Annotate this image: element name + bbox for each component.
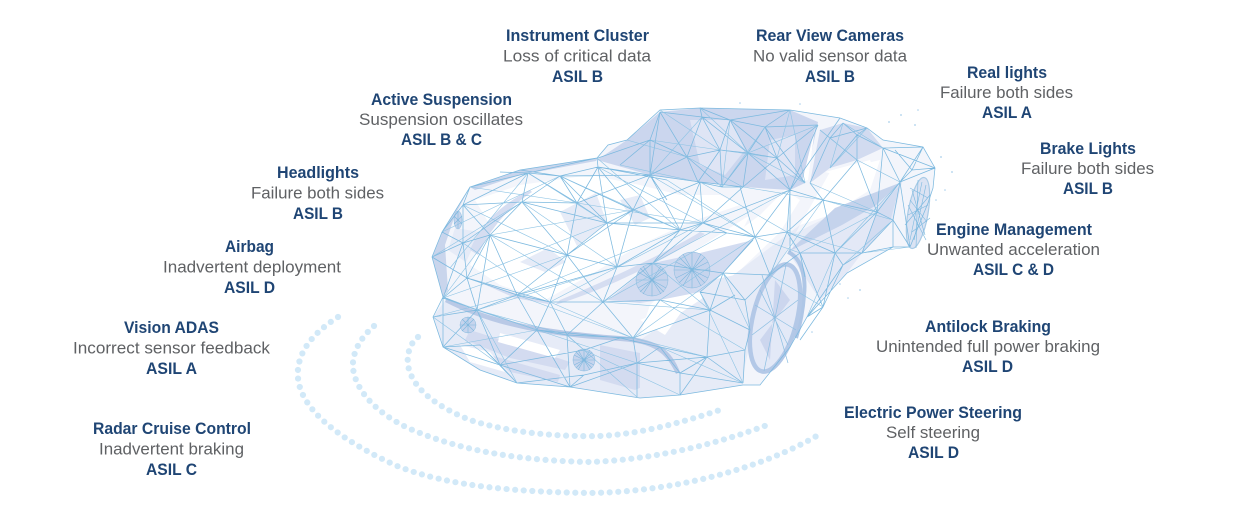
sweeping hood creases — [470, 190, 705, 305]
label: Vision ADAS: Vision ADAS — [124, 318, 219, 337]
label: Radar Cruise Control — [93, 419, 251, 479]
label: Airbag: ASIL D — [224, 278, 275, 297]
windshield — [597, 108, 818, 190]
rear fender crease — [788, 182, 902, 252]
label: Vision ADAS — [73, 318, 270, 378]
label: Active Suspension: Suspension oscillates — [359, 110, 523, 129]
fender top edge — [432, 158, 597, 297]
label: Real lights: Failure both sides — [940, 83, 1073, 102]
lower door panel — [640, 225, 800, 398]
mesh scoop lamps — [454, 211, 710, 371]
label: Brake Lights — [1021, 139, 1154, 198]
car body base fill — [432, 108, 935, 398]
label: Instrument Cluster: ASIL B — [552, 67, 603, 86]
label: Electric Power Steering: Electric Power Steering — [844, 403, 1022, 422]
label: Engine Management — [927, 220, 1100, 279]
label: Radar Cruise Control: ASIL C — [146, 460, 197, 479]
label: Active Suspension: Active Suspension — [371, 90, 512, 109]
label: Rear View Cameras — [753, 26, 908, 86]
secondary long mesh lines — [432, 108, 910, 397]
label: Headlights: Failure both sides — [251, 184, 384, 202]
label: Antilock Braking: ASIL D — [962, 357, 1013, 376]
front crease band — [445, 298, 680, 374]
label: Instrument Cluster: Instrument Cluster — [506, 26, 649, 45]
label: Engine Management: Engine Management — [936, 220, 1092, 239]
label: Antilock Braking: Antilock Braking — [925, 317, 1051, 336]
facet shading on hood — [448, 193, 845, 312]
rear wheel and tail mesh — [902, 176, 934, 250]
label: Engine Management: ASIL C & D — [973, 260, 1054, 279]
label: Real lights: Real lights — [967, 63, 1047, 82]
label: Electric Power Steering — [844, 403, 1022, 462]
label: Engine Management: Unwanted acceleration — [927, 240, 1100, 259]
label: Antilock Braking: Unintended full power braking — [876, 337, 1100, 356]
white door gap — [640, 215, 750, 335]
front wheel — [740, 259, 810, 377]
label: Radar Cruise Control: Inadvertent braking — [99, 440, 244, 458]
triangulated wire mesh — [432, 108, 935, 398]
dotted radar arcs — [298, 317, 820, 493]
label: Airbag: Airbag — [225, 237, 274, 256]
wireframe car — [432, 102, 953, 398]
label: Rear View Cameras: No valid sensor data — [753, 46, 908, 66]
label: Real lights: ASIL A — [982, 103, 1032, 122]
label: Antilock Braking — [876, 317, 1100, 376]
white grille gaps — [460, 333, 560, 372]
label: Active Suspension — [359, 90, 523, 149]
front bumper and grille fill — [433, 298, 680, 398]
label: Brake Lights: Brake Lights — [1040, 139, 1136, 158]
label: Vision ADAS: Incorrect sensor feedback — [73, 338, 270, 358]
label: Real lights — [940, 63, 1073, 122]
light facets on hood and body — [470, 160, 880, 380]
label: Headlights — [251, 163, 384, 223]
label: Rear View Cameras: ASIL B — [805, 67, 855, 86]
front wheel arch — [788, 252, 804, 338]
rear quarter panel — [788, 182, 902, 300]
label: Vision ADAS: ASIL A — [146, 359, 197, 378]
label: Brake Lights: Failure both sides — [1021, 159, 1154, 178]
label: Radar Cruise Control: Radar Cruise Control — [93, 419, 251, 438]
label: Headlights: ASIL B — [293, 204, 343, 223]
hood scoop — [608, 240, 753, 303]
label: Airbag: Inadvertent deployment — [163, 258, 341, 276]
lamp mesh detail — [454, 212, 710, 371]
label: Instrument Cluster: Loss of critical data — [503, 46, 652, 66]
label: Brake Lights: ASIL B — [1063, 179, 1113, 198]
label: Electric Power Steering: ASIL D — [908, 443, 959, 462]
label: Instrument Cluster — [503, 26, 652, 86]
label: Active Suspension: ASIL B & C — [401, 130, 482, 149]
white roof gap beneath windows — [802, 128, 875, 182]
side window — [810, 123, 883, 183]
label: Electric Power Steering: Self steering — [886, 423, 980, 442]
label: Rear View Cameras: Rear View Cameras — [756, 26, 904, 45]
scattered speck particles — [739, 102, 953, 333]
label: Headlights: Headlights — [277, 163, 359, 182]
label: Airbag — [163, 237, 341, 297]
